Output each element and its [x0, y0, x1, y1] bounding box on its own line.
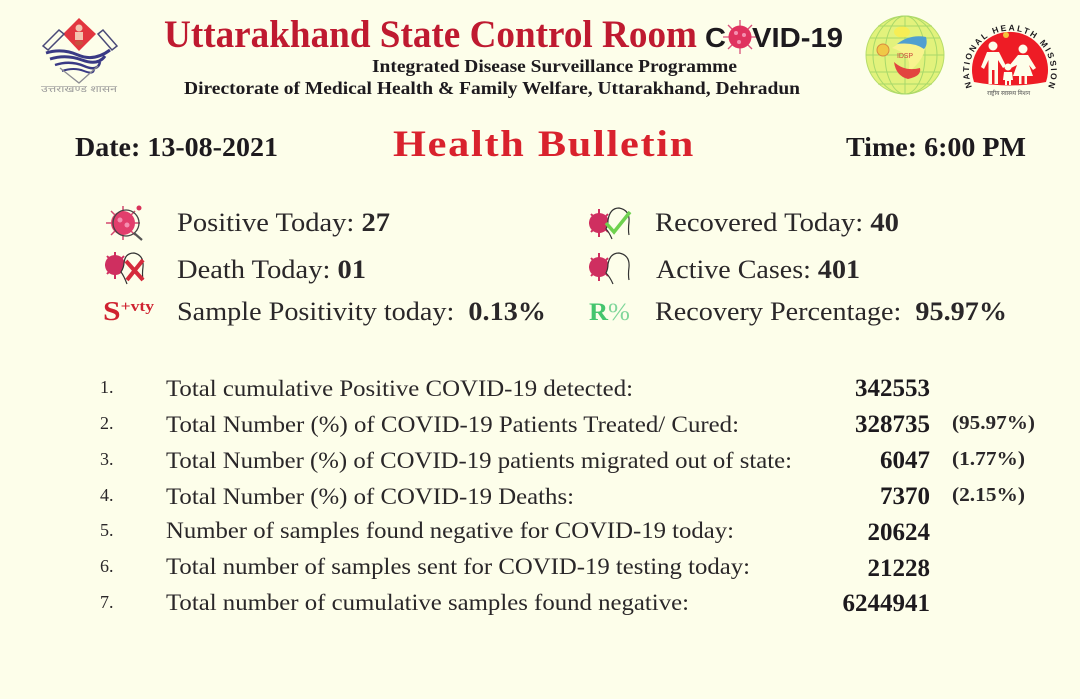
- label: recovery percentage: Recovery Percentage: 95.97%: [655, 296, 1007, 326]
- row 4: [100, 483, 1025, 510]
- icon: positive today: [106, 206, 142, 240]
- label: active cases: Active Cases: 401: [656, 254, 860, 284]
- row 5: Number of samples found negative for COVID-19 today:: [166, 518, 734, 544]
- COVID-19 logo: [705, 20, 843, 54]
- row 1: Total cumulative Positive COVID-19 detected:: [166, 376, 633, 402]
- time: Time: 6:00 PM: [846, 131, 1026, 162]
- row 7: 7.: [100, 592, 114, 612]
- header: [41, 13, 1057, 98]
- row 7: [100, 590, 930, 617]
- icon: Uttarakhand state emblem: [41, 18, 118, 94]
- row 4: Total Number (%) of COVID-19 Deaths:: [166, 484, 574, 510]
- row 2: (95.97%): [952, 412, 1035, 434]
- row 2: [100, 411, 1035, 438]
- row 4: 7370: [880, 483, 930, 510]
- icon: recovered today: [589, 208, 630, 239]
- subtitle: directorate: Directorate of Medical Health & Family Welfare, Uttarakhand, Dehradun: [184, 78, 800, 98]
- heading: Health Bulletin: Health Bulletin: [393, 124, 695, 165]
- icon: IDSP globe logo: IDSP: [897, 53, 913, 60]
- icon: National Health Mission logo: राष्ट्रीय स्वास्थ्य मिशन: [987, 89, 1031, 97]
- COVID-19 logo: C: [705, 22, 726, 53]
- row 1: 1.: [100, 377, 114, 397]
- row 3: [100, 447, 1025, 474]
- row 4: (2.15%): [952, 484, 1025, 506]
- row 5: [100, 518, 930, 546]
- COVID-19 logo: VID-19: [752, 22, 843, 53]
- label: recovered today: Recovered Today: 40: [655, 207, 899, 237]
- row 3: (1.77%): [952, 448, 1025, 470]
- title: Uttarakhand State Control Room: [164, 13, 697, 56]
- row 7: Total number of cumulative samples found negative:: [166, 590, 689, 616]
- icon: National Health Mission logo: NATIONAL HEALTH MISSION: [963, 24, 1057, 88]
- panel: today's summary: [103, 206, 1007, 326]
- row 3: 6047: [880, 447, 930, 474]
- row 6: 21228: [868, 555, 930, 582]
- icon: IDSP globe logo: [866, 16, 944, 94]
- subtitle: programme: Integrated Disease Surveillance Programme: [372, 56, 737, 76]
- row 2: Total Number (%) of COVID-19 Patients Treated/ Cured:: [166, 412, 739, 438]
- row 5: 5.: [100, 520, 114, 540]
- row 6: 6.: [100, 556, 114, 576]
- panel: cumulative statistics: [100, 375, 1035, 617]
- row 2: 2.: [100, 413, 114, 433]
- row 3: 3.: [100, 449, 114, 469]
- date: Date: 13-08-2021: [75, 131, 278, 162]
- row 6: [100, 554, 930, 582]
- row 1: 342553: [855, 375, 930, 402]
- icon: recovery percentage: R%: [589, 299, 630, 326]
- row 5: 20624: [868, 519, 930, 546]
- icon: death today: [105, 252, 143, 284]
- row 3: Total Number (%) of COVID-19 patients migrated out of state:: [166, 448, 792, 474]
- label: positive today: Positive Today: 27: [177, 207, 390, 237]
- label: death today: Death Today: 01: [177, 254, 366, 284]
- row 6: Total number of samples sent for COVID-19 testing today:: [166, 554, 750, 580]
- row 1: [100, 375, 930, 402]
- row 7: 6244941: [842, 590, 930, 617]
- row 4: 4.: [100, 485, 114, 505]
- icon: sample positivity: S: [103, 296, 118, 326]
- icon: Uttarakhand state emblem: उत्तराखण्ड शासन: [41, 84, 118, 94]
- icon: sample positivity: +vty: [121, 299, 155, 315]
- row 2: 328735: [855, 411, 930, 438]
- label: sample positivity: Sample Positivity today: 0.13%: [177, 296, 546, 326]
- icon: active cases: [589, 253, 629, 284]
